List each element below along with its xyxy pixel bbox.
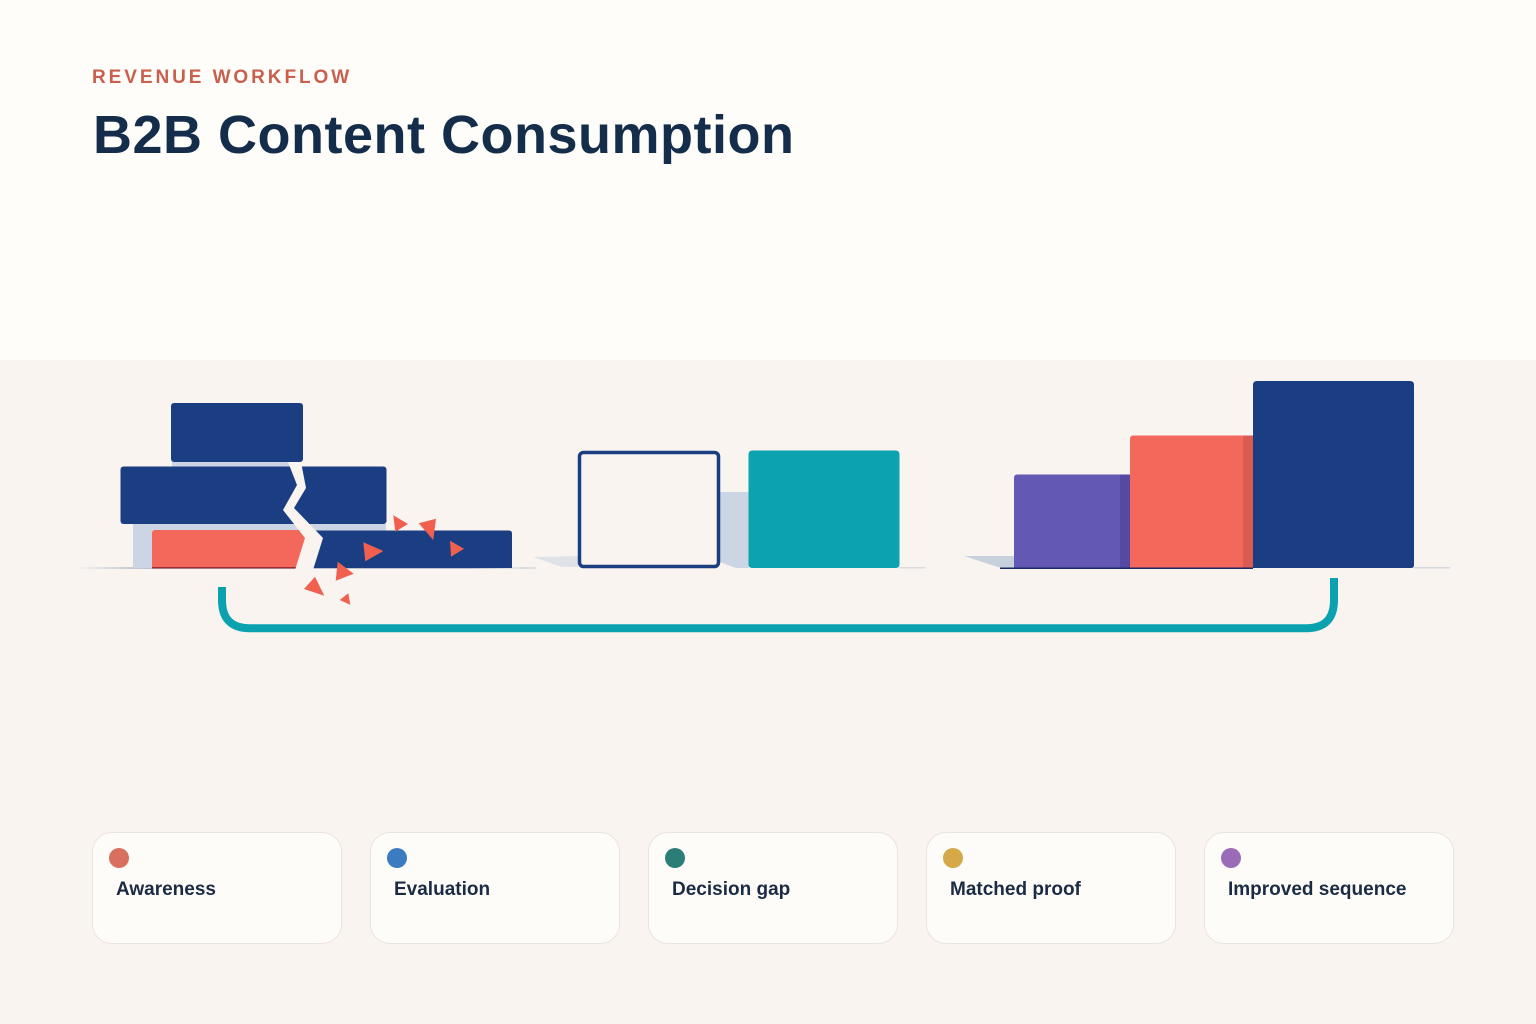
outlined box <box>580 452 718 566</box>
crack <box>283 462 323 570</box>
header band <box>0 0 1536 360</box>
dot <box>665 848 685 868</box>
middle block <box>120 466 386 524</box>
empty box and matched teal block <box>520 450 925 568</box>
label: Matched proof <box>950 879 1081 900</box>
card: evaluation <box>370 832 620 944</box>
top block <box>171 403 303 462</box>
dot <box>387 848 407 868</box>
coral base block <box>152 530 310 568</box>
ascending blocks <box>964 381 1450 569</box>
purple block <box>1014 474 1130 568</box>
broken stack of blocks <box>75 403 537 605</box>
card: improved sequence <box>1204 832 1454 944</box>
card: matched proof <box>926 832 1176 944</box>
label: Awareness <box>116 879 216 900</box>
card: decision gap <box>648 832 898 944</box>
navy block <box>1253 381 1414 568</box>
connector <box>222 578 1334 628</box>
navy base block <box>310 530 512 568</box>
card: awareness <box>92 832 342 944</box>
label: Evaluation <box>394 879 490 900</box>
shards <box>304 515 464 605</box>
title: B2B Content Consumption <box>93 105 794 165</box>
dot <box>109 848 129 868</box>
label: Improved sequence <box>1228 879 1406 900</box>
eyebrow: REVENUE WORKFLOW <box>92 67 352 88</box>
coral block <box>1130 436 1253 568</box>
dot <box>1221 848 1241 868</box>
label: Decision gap <box>672 879 790 900</box>
teal block <box>748 450 900 568</box>
dot <box>943 848 963 868</box>
